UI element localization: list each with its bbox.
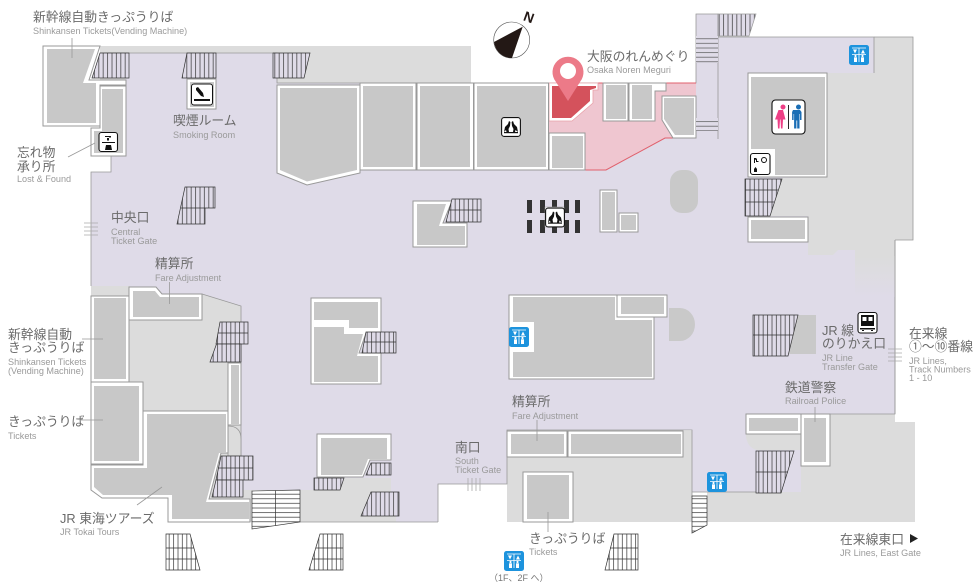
left grey back-of-house area xyxy=(91,286,252,522)
room: Shinkansen ticket machines west xyxy=(91,296,129,382)
label: railroad police xyxy=(785,380,846,406)
stair: JR transfer xyxy=(753,315,798,356)
label: JR line transfer gate: Transfer Gate xyxy=(822,362,878,372)
ticket gates xyxy=(84,223,902,491)
highlighted shop xyxy=(549,83,598,121)
label: Shinkansen tickets west: 新幹線自動 xyxy=(8,327,72,342)
stair: outside 3 xyxy=(605,534,638,570)
man figure xyxy=(792,105,802,128)
Osaka Noren Meguri pink zone xyxy=(549,83,696,170)
divider xyxy=(788,105,790,129)
room: ticket office west xyxy=(91,382,143,464)
icon: elevator north-east xyxy=(849,45,869,65)
pink area xyxy=(549,83,696,170)
label: Shinkansen tickets west: きっぷうりば xyxy=(8,340,84,355)
label: smoking room xyxy=(173,113,237,140)
label: JR line transfer gate: のりかえ口 xyxy=(822,336,886,351)
stair: centre-west xyxy=(177,187,215,224)
label: Shinkansen tickets north: 新幹線自動きっぷうりば xyxy=(33,10,173,24)
icon: restroom among pillars xyxy=(545,207,564,227)
stair: north 2 xyxy=(182,53,216,78)
grey oval pillar xyxy=(670,170,698,213)
room: small kiosk xyxy=(619,213,638,232)
room: east small xyxy=(748,217,808,242)
label: Shinkansen tickets north: Shinkansen Tickets(Vending Machine) xyxy=(33,26,187,36)
stair: centre north xyxy=(446,199,481,222)
label: central ticket gate: 中央口 xyxy=(111,210,149,225)
rooms xyxy=(43,46,830,522)
room: shop with pointed base xyxy=(277,85,360,185)
stair: outside 2 xyxy=(309,534,343,570)
stair: tours lower xyxy=(212,480,243,497)
floor plan base xyxy=(91,14,926,522)
stair: east toilet xyxy=(745,179,782,216)
label: JR lines east gate xyxy=(840,532,921,558)
label: south ticket gate: South xyxy=(455,456,479,466)
concourse outline xyxy=(91,14,895,522)
room: centre north xyxy=(413,201,467,247)
stair: fare west upper xyxy=(216,322,248,344)
south grey area west xyxy=(300,478,399,522)
label: railroad police: Railroad Police xyxy=(785,396,846,406)
stair: south room right xyxy=(366,463,391,475)
label: JR line transfer gate: JR Line xyxy=(822,353,853,363)
label: south ticket gate: Ticket Gate xyxy=(455,465,501,475)
label: JR lines track numbers: 1 - 10 xyxy=(909,373,932,383)
room: shop 3 xyxy=(417,83,474,170)
leader lines xyxy=(68,38,815,532)
pillar row bottom xyxy=(527,220,580,233)
stair: centre west block xyxy=(362,332,396,353)
room: restrooms xyxy=(748,73,827,177)
label: JR line transfer gate xyxy=(822,323,886,372)
soft grey wall block by JR gate xyxy=(855,256,895,297)
stair: north 1 xyxy=(92,53,129,78)
label: JR Tokai Tours: JR Tokai Tours xyxy=(60,527,120,537)
room: east lower xyxy=(746,414,801,434)
room: pink lower shop xyxy=(549,133,585,170)
compass circle xyxy=(494,22,530,58)
label: tickets west: Tickets xyxy=(8,431,37,441)
label: Osaka Noren Meguri: Osaka Noren Meguri xyxy=(587,65,671,75)
room: south long xyxy=(568,431,683,457)
label: fare adjustment south: Fare Adjustment xyxy=(512,411,579,421)
label: lost and found xyxy=(17,145,71,184)
room: fare adjustment south xyxy=(507,431,567,457)
stair: top right xyxy=(718,14,756,36)
label: smoking room: 喫煙ルーム xyxy=(173,113,237,128)
label: fare adjustment south xyxy=(512,394,579,421)
red border of pink area xyxy=(598,82,696,84)
stair: small horizontal xyxy=(692,496,707,533)
curved wall near strip xyxy=(228,426,241,456)
icon: lost and found xyxy=(99,132,118,152)
south gate xyxy=(468,478,480,491)
label: JR lines track numbers xyxy=(909,326,973,383)
room: tickets south xyxy=(523,472,573,522)
red diagonal border xyxy=(585,138,696,170)
room: centre small right xyxy=(617,295,667,317)
icon: multipurpose toilet xyxy=(750,154,770,174)
outer line of right grey area xyxy=(874,37,913,240)
label: Osaka Noren Meguri xyxy=(587,49,689,75)
icon: train xyxy=(858,312,877,333)
icon: elevator south-east xyxy=(707,472,727,492)
label: central ticket gate: Ticket Gate xyxy=(111,236,157,246)
curved wall east xyxy=(746,414,801,450)
label: south ticket gate: 南口 xyxy=(455,440,481,455)
lavender concourse xyxy=(91,14,895,522)
label: fare adjustment west: 精算所 xyxy=(155,256,194,271)
room: pink upper shop 2 xyxy=(629,83,666,121)
grey block beside JR stair xyxy=(789,315,816,354)
right grey back-of-house area xyxy=(707,37,915,522)
stair: east lower xyxy=(756,451,794,493)
pin body xyxy=(552,57,584,101)
woman figure xyxy=(775,105,786,128)
south grey area east xyxy=(507,431,692,522)
room: shop with restroom xyxy=(474,83,548,170)
icon: elevator south xyxy=(504,551,524,571)
stair: tours upper xyxy=(216,456,253,480)
room: pink right shop xyxy=(662,96,696,138)
black pillars xyxy=(527,200,580,233)
stair: fare west lower xyxy=(210,344,241,362)
stair: big horizontal xyxy=(252,490,300,529)
label: JR lines track numbers: Track Numbers xyxy=(909,364,971,374)
icon: elevator centre xyxy=(509,327,529,347)
label: central ticket gate: Central xyxy=(111,227,140,237)
central gate xyxy=(84,223,98,235)
room: railroad police xyxy=(801,414,830,466)
label: to 1F and 2F: （1F、2F へ） xyxy=(489,573,549,583)
room: south west xyxy=(317,434,391,477)
label: Shinkansen tickets west: (Vending Machine) xyxy=(8,366,84,376)
north letter: N xyxy=(522,8,536,26)
compass needle xyxy=(494,27,523,58)
stair: south room lower xyxy=(314,478,344,490)
room: narrow strip xyxy=(228,363,241,425)
room: centre main block xyxy=(509,295,654,379)
highlighted shop fill xyxy=(552,86,596,118)
white notch at east wall xyxy=(896,241,926,422)
room: centre west block xyxy=(311,298,381,384)
stair: south lower xyxy=(361,492,399,516)
label: south ticket gate xyxy=(455,440,501,475)
top grey corridor strip xyxy=(100,46,471,83)
room: pink upper shop 1 xyxy=(603,83,628,121)
label: Shinkansen tickets north xyxy=(33,10,187,36)
room: shop 2 xyxy=(360,83,416,170)
room: smoking room xyxy=(187,79,216,109)
label: JR line transfer gate: JR 線 xyxy=(822,323,854,338)
label: JR Tokai Tours xyxy=(60,511,155,537)
stair lines: corridor south xyxy=(696,118,718,131)
label: JR lines east gate: 在来線東口 xyxy=(840,532,904,547)
label: fare adjustment south: 精算所 xyxy=(512,394,551,409)
label: Shinkansen tickets west xyxy=(8,327,87,376)
JR transfer gate xyxy=(888,349,902,361)
label: lost and found: 忘れ物 xyxy=(17,145,56,160)
label: central ticket gate xyxy=(111,210,157,246)
grey round pillar xyxy=(669,308,695,341)
label: fare adjustment west xyxy=(155,256,222,283)
stair lines: corridor north xyxy=(696,36,718,63)
label: JR lines track numbers: ①〜⑩番線 xyxy=(909,339,973,354)
icon: smoking xyxy=(192,84,212,105)
label: Osaka Noren Meguri: 大阪のれんめぐり xyxy=(587,49,689,64)
pin hole xyxy=(560,63,576,79)
label: tickets west xyxy=(8,414,84,441)
compass xyxy=(494,8,536,58)
stairs xyxy=(92,14,798,570)
label: JR lines track numbers: 在来線 xyxy=(909,326,948,341)
label: JR Tokai Tours: JR 東海ツアーズ xyxy=(60,511,155,526)
lavender floor beside east stair xyxy=(757,450,801,492)
room: lost and found xyxy=(91,86,126,156)
room: fare adjustment west xyxy=(129,287,202,320)
label: JR lines track numbers: JR Lines, xyxy=(909,356,947,366)
label: tickets south xyxy=(529,531,605,557)
room: tall kiosk xyxy=(600,190,617,232)
label: lost and found: 承り所 xyxy=(17,159,56,174)
icon: restroom in shop xyxy=(502,118,520,136)
stair: north 3 xyxy=(273,53,310,78)
label: tickets south: きっぷうりば xyxy=(529,531,605,546)
label: tickets west: きっぷうりば xyxy=(8,414,84,429)
wall line restored xyxy=(894,240,896,414)
stair: outside 1 xyxy=(166,534,200,570)
room: Shinkansen tickets north xyxy=(43,46,126,126)
label: smoking room: Smoking Room xyxy=(173,130,235,140)
icon: men and women restroom xyxy=(772,100,805,134)
label: railroad police: 鉄道警察 xyxy=(785,380,836,395)
label: Shinkansen tickets west: Shinkansen Tickets xyxy=(8,357,87,367)
location pin xyxy=(552,57,584,101)
label: fare adjustment west: Fare Adjustment xyxy=(155,273,222,283)
room: JR Tokai Tours xyxy=(91,411,250,522)
pillar row top xyxy=(527,200,580,213)
label: lost and found: Lost & Found xyxy=(17,174,71,184)
label: tickets south: Tickets xyxy=(529,547,558,557)
label: JR lines east gate: JR Lines, East Gate xyxy=(840,548,921,558)
